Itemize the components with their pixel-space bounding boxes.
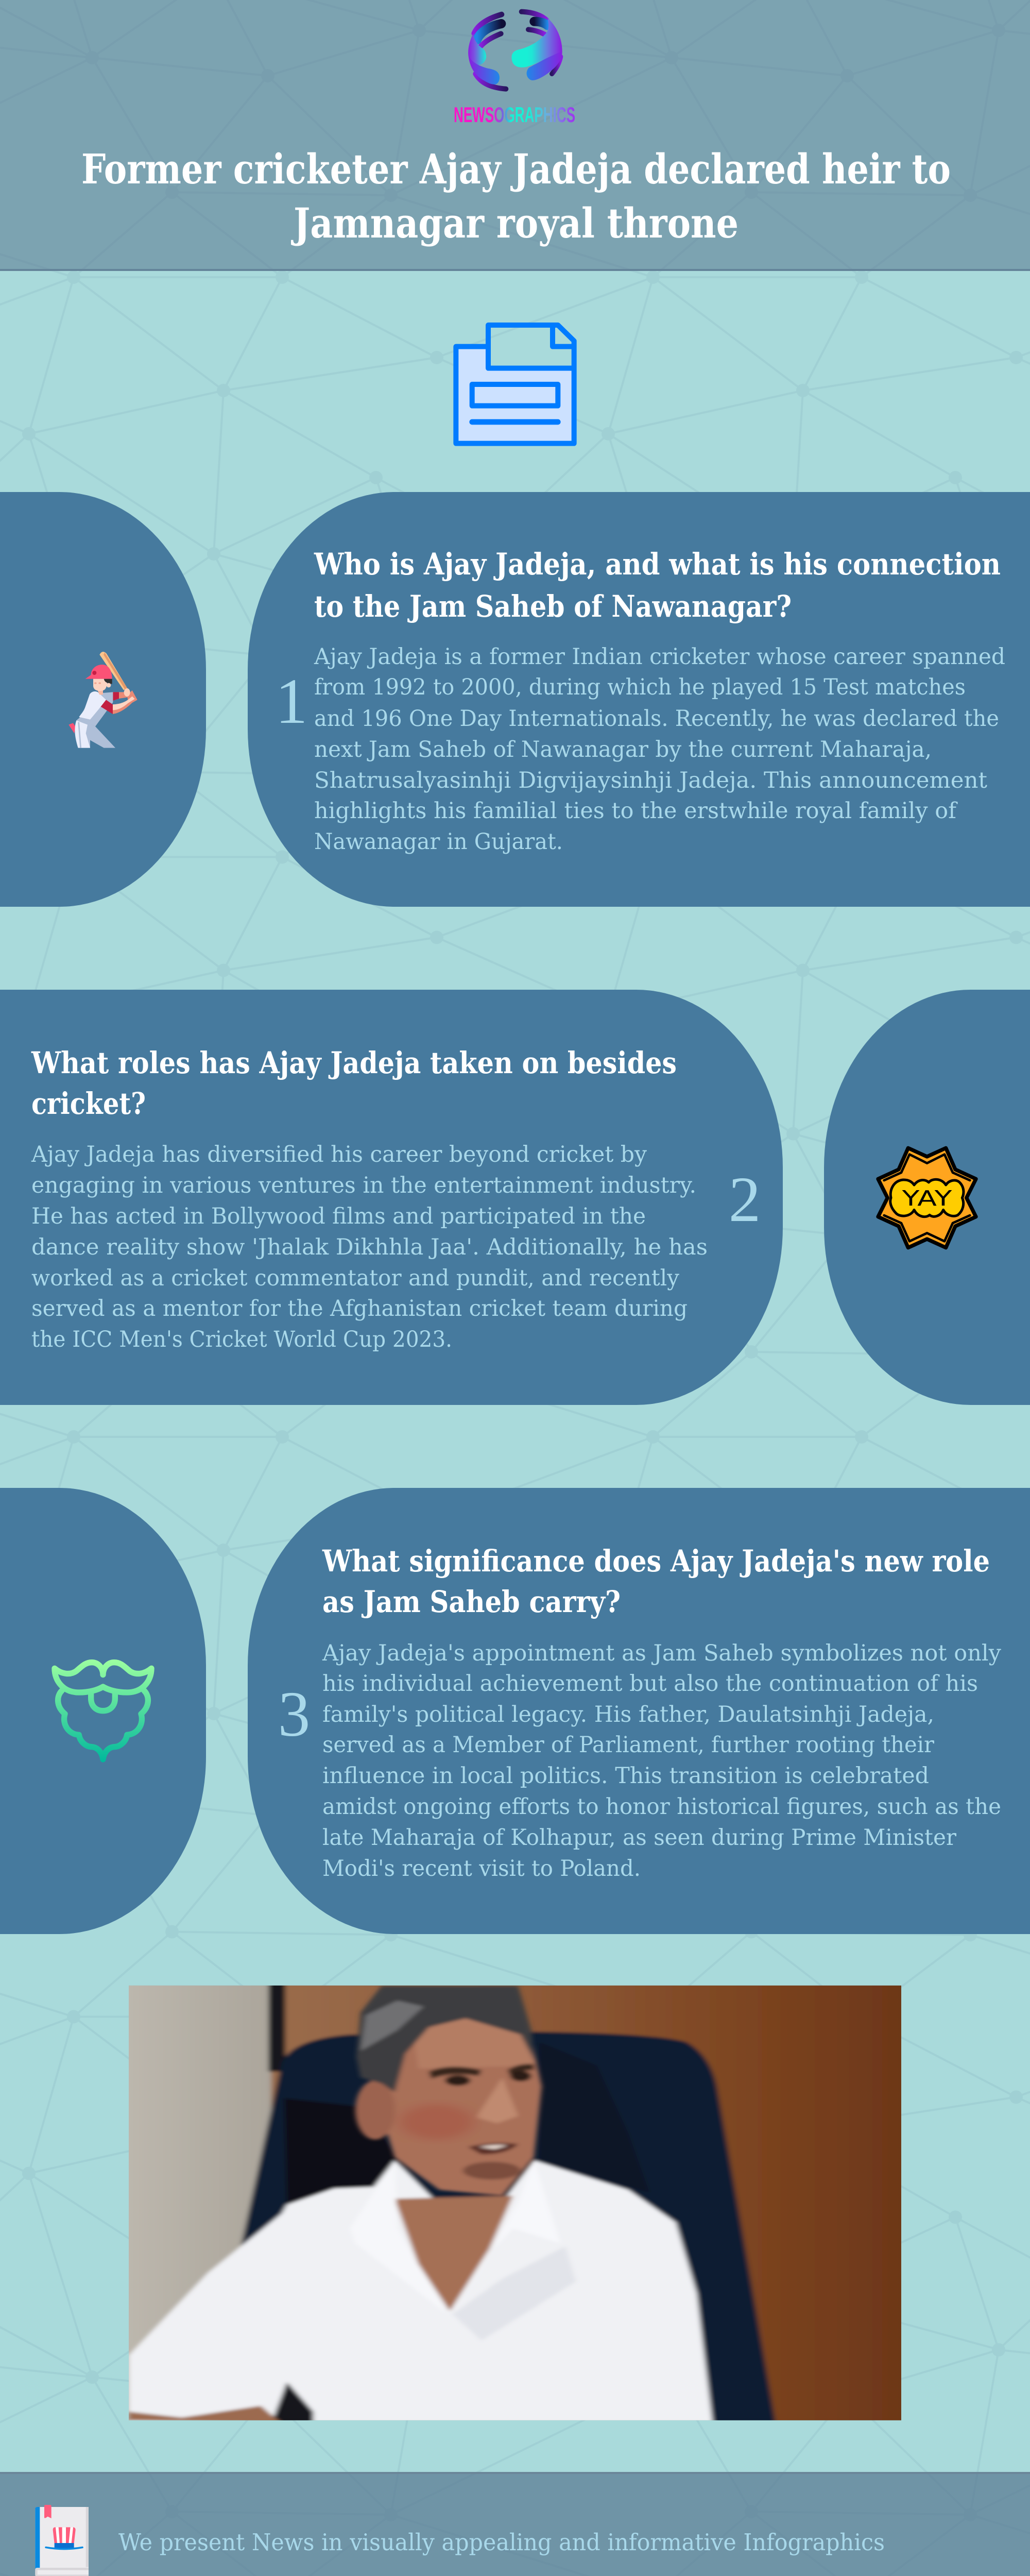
body text: section 1: next Jam Saheb of Nawanagar by the current Maharaja, xyxy=(314,737,932,762)
body text: section 1: from 1992 to 2000, during which he played 15 Test matches xyxy=(314,674,966,700)
icon panel: section 3 xyxy=(0,1488,206,1934)
body text: section 3: served as a Member of Parliament, further rooting their xyxy=(322,1732,934,1758)
body text: section 3: amidst ongoing efforts to honor historical figures, such as the xyxy=(322,1794,1001,1820)
icon: logo globe xyxy=(468,12,562,89)
icon: beard and moustache xyxy=(55,1663,151,1759)
tagline text: We present News in visually appealing and informative Infographics xyxy=(118,2529,885,2556)
heading: section 1 xyxy=(314,547,1001,624)
panel: section 2 xyxy=(0,990,1030,1405)
title xyxy=(81,145,951,247)
body text: section 1: highlights his familial ties to the erstwhile royal family of xyxy=(314,798,958,824)
number 1: 1 xyxy=(276,666,307,737)
heading: section 1: to the Jam Saheb of Nawanagar? xyxy=(314,589,792,624)
panel: bottom tagline band xyxy=(0,2472,1030,2576)
heading: section 3 xyxy=(322,1544,990,1619)
body text: section 2: dance reality show 'Jhalak Dikhhla Jaa'. Additionally, he has xyxy=(31,1234,708,1260)
body text: section 3 xyxy=(322,1640,1002,1882)
body text: section 2: the ICC Men's Cricket World Cup 2023. xyxy=(31,1327,452,1352)
body text: section 2: served as a mentor for the Afghanistan cricket team during xyxy=(31,1296,688,1321)
number 3: 3 xyxy=(278,1679,310,1750)
panel: section 1 xyxy=(0,492,1030,907)
text panel: section 1 xyxy=(248,492,1030,907)
body text: section 2: worked as a cricket commentator and pundit, and recently xyxy=(31,1265,680,1291)
body text: section 2: engaging in various ventures in the entertainment industry. xyxy=(31,1173,696,1198)
body text: section 1: Ajay Jadeja is a former Indian cricketer whose career spanned xyxy=(314,644,1005,670)
text panel: section 3 xyxy=(248,1488,1030,1934)
body text: section 3: Modi's recent visit to Poland. xyxy=(322,1856,641,1882)
icon panel: section 1 xyxy=(0,492,206,907)
body text: section 1: and 196 One Day Internationals. Recently, he was declared the xyxy=(314,706,999,732)
body text: section 2: Ajay Jadeja has diversified his career beyond cricket by xyxy=(31,1142,647,1167)
heading: section 2: cricket? xyxy=(31,1086,146,1121)
body text: section 3: late Maharaja of Kolhapur, as seen during Prime Minister xyxy=(322,1825,956,1851)
icon: book with hat xyxy=(35,2505,89,2576)
heading: section 2: What roles has Ajay Jadeja taken on besides xyxy=(31,1045,677,1080)
body text: section 3: Ajay Jadeja's appointment as Jam Saheb symbolizes not only xyxy=(322,1640,1002,1666)
icon: cricket batter xyxy=(68,652,138,748)
title: Jamnagar royal throne xyxy=(291,199,739,247)
body text: section 1: Shatrusalyasinhji Digvijaysinhji Jadeja. This announcement xyxy=(314,768,987,793)
photo: Ajay Jadeja xyxy=(119,1980,912,2424)
number 2: 2 xyxy=(729,1164,761,1235)
panel: header band xyxy=(0,0,1030,271)
body text: section 3: influence in local politics. This transition is celebrated xyxy=(322,1763,929,1789)
body text: section 2: He has acted in Bollywood films and participated in the xyxy=(31,1204,646,1229)
body text: section 1 xyxy=(314,644,1005,855)
icon: document xyxy=(456,325,574,444)
logo: Newsographics header xyxy=(454,12,575,127)
icon: YAY badge xyxy=(878,1148,976,1248)
heading: section 2 xyxy=(31,1045,677,1121)
icon panel: section 2 xyxy=(824,990,1030,1405)
icon: YAY badge: YAY xyxy=(901,1186,952,1211)
body text: section 1: Nawanagar in Gujarat. xyxy=(314,829,563,855)
body text: section 3: his individual achievement but also the continuation of his xyxy=(322,1671,978,1697)
text panel: section 2 xyxy=(0,990,783,1405)
heading: section 3: as Jam Saheb carry? xyxy=(322,1584,621,1619)
body text: section 2 xyxy=(31,1142,708,1352)
panel: section 3 xyxy=(0,1488,1030,1934)
logo wordmark: NEWSOGRAPHICS xyxy=(454,103,575,127)
body text: section 3: family's political legacy. His father, Daulatsinhji Jadeja, xyxy=(322,1702,934,1727)
